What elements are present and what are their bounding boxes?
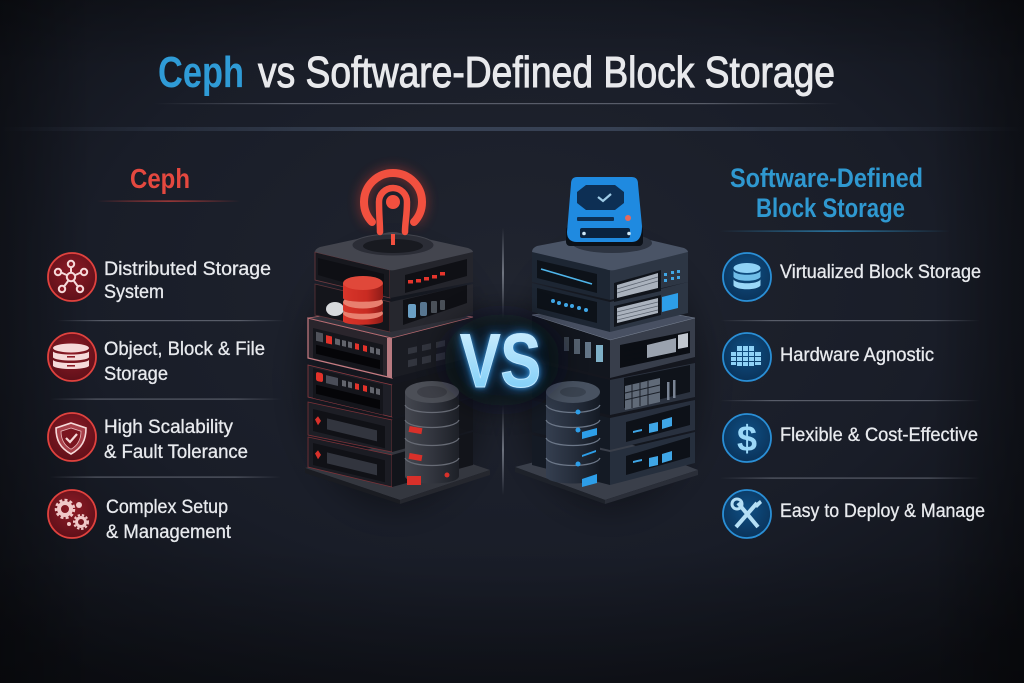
base plate	[515, 440, 698, 504]
text: Object, Block & File Storage: Storage	[104, 364, 168, 385]
title	[154, 48, 840, 104]
server layers	[308, 232, 473, 487]
illustration: software-defined block storage tower	[515, 177, 705, 510]
title: vs Software-Defined Block Storage	[258, 48, 835, 97]
text: Hardware Agnostic: Hardware Agnostic	[780, 345, 934, 366]
gray database stack	[405, 381, 459, 485]
icon: database	[48, 333, 96, 381]
text: Object, Block & File Storage	[104, 339, 265, 385]
center divider	[502, 228, 504, 495]
right-face panels	[614, 270, 690, 475]
text: Distributed Storage System: Distributed Storage	[104, 259, 271, 280]
red database stack	[326, 276, 383, 325]
left-face panels	[313, 258, 385, 482]
icon: Ceph logo	[364, 173, 422, 245]
blue database stack	[546, 381, 600, 487]
text: Distributed Storage System: System	[104, 282, 164, 303]
panel: Software-Defined Block Storage features	[720, 163, 985, 538]
panel: Ceph features	[48, 163, 285, 543]
text: Complex Setup & Management	[106, 497, 232, 543]
heading: Software-Defined Block Storage	[720, 163, 950, 232]
server layers	[532, 232, 695, 485]
text: Complex Setup & Management: & Management	[106, 522, 232, 543]
VS label: VS	[460, 319, 541, 404]
icon: tools	[723, 490, 771, 538]
icon: hardware grid	[723, 333, 771, 381]
VS label: VS	[460, 319, 541, 404]
icon: block storage stack	[723, 253, 771, 301]
base plate	[305, 440, 490, 504]
text: High Scalability & Fault Tolerance: & Fault Tolerance	[104, 442, 248, 463]
illustration: Ceph server tower	[300, 173, 490, 510]
icon: network nodes	[48, 253, 96, 301]
title: Ceph	[158, 48, 244, 97]
icon: gears	[48, 490, 96, 538]
text: Flexible & Cost-Effective: Flexible & Cost-Effective	[780, 425, 978, 446]
text: Easy to Deploy & Manage: Easy to Deploy & Manage	[780, 501, 985, 522]
VS label: VS	[460, 319, 541, 404]
text: High Scalability & Fault Tolerance: High Scalability	[104, 417, 233, 438]
heading: Software-Defined Block Storage: Software-Defined	[730, 163, 923, 193]
text: Complex Setup & Management: Complex Setup	[106, 497, 228, 518]
text: High Scalability & Fault Tolerance	[104, 417, 248, 463]
icon: blue hard drive	[566, 177, 643, 246]
text: Virtualized Block Storage: Virtualized Block Storage	[780, 262, 981, 283]
icon: dollar: $	[737, 418, 757, 459]
text: Object, Block & File Storage: Object, Block & File	[104, 339, 265, 360]
left-face panels	[537, 260, 603, 362]
right-face panels	[403, 259, 467, 367]
text: Distributed Storage System	[104, 259, 271, 303]
heading: Software-Defined Block Storage: Block Storage	[756, 193, 905, 223]
icon: dollar	[723, 414, 771, 462]
icon: shield	[48, 413, 96, 461]
heading: Ceph: Ceph	[130, 163, 190, 194]
